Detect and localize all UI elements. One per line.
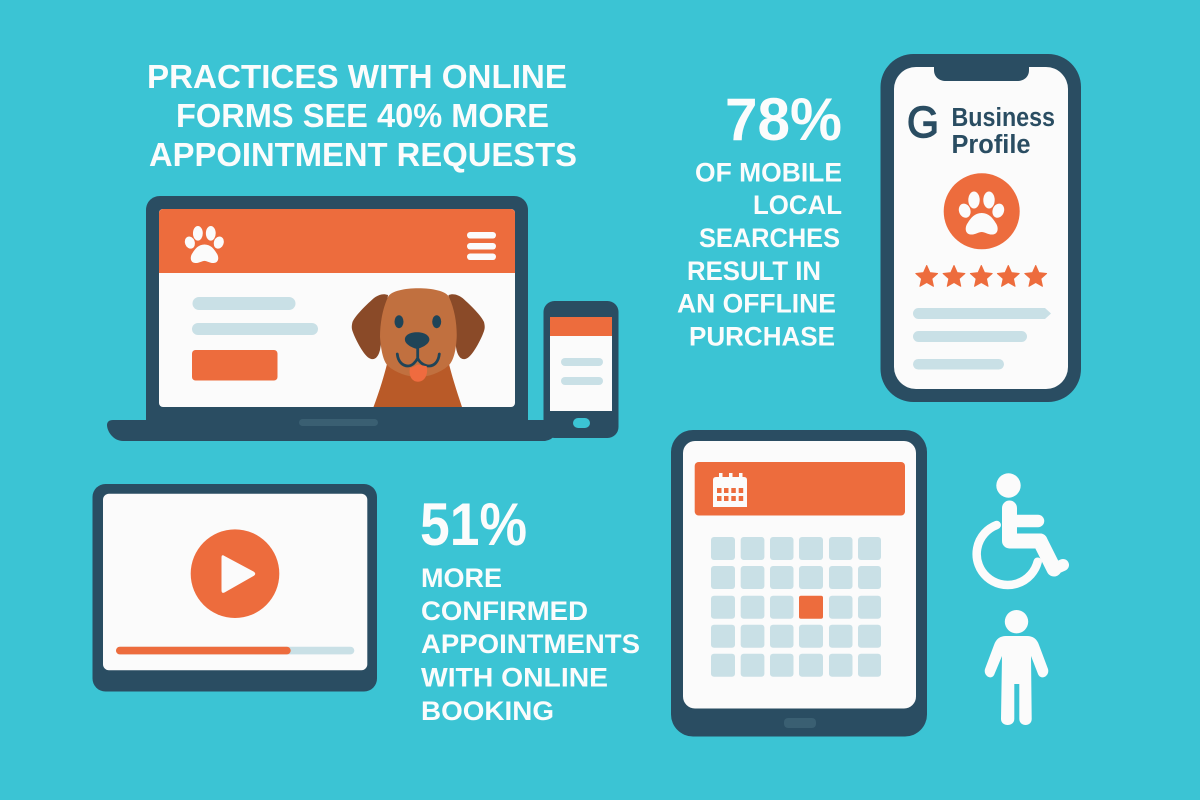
- tablet screen: [103, 494, 367, 670]
- five star rating: [916, 266, 1047, 286]
- selected date: [799, 596, 823, 619]
- phone content lines: [561, 358, 603, 385]
- laptop trackpad: [299, 419, 378, 426]
- stat description: WITH ONLINE: [421, 663, 608, 693]
- business profile label: [952, 104, 1055, 159]
- stat: 51 percent: [420, 491, 640, 726]
- title: [147, 58, 577, 173]
- stat description: LOCAL: [753, 190, 842, 220]
- icon: calendar: [713, 473, 747, 507]
- icon: paw logo: [183, 226, 226, 263]
- form lines: [192, 297, 318, 335]
- icon: menu: [467, 232, 496, 260]
- icon: play button: [191, 529, 279, 618]
- phone screen: [894, 67, 1068, 389]
- phone body: [544, 301, 618, 438]
- logo G: G: [907, 98, 939, 147]
- video tablet: [92, 484, 377, 692]
- phone frame: [880, 54, 1081, 402]
- business profile label: Profile: [952, 131, 1030, 159]
- stat description: MORE: [421, 563, 502, 593]
- stat description: [677, 158, 842, 352]
- icon: standing person: [985, 610, 1048, 725]
- illustration: dog: [352, 288, 485, 407]
- stat description: [421, 563, 640, 726]
- laptop body: [146, 196, 528, 424]
- laptop screen: [159, 209, 515, 407]
- progress bar: [116, 647, 354, 654]
- title: FORMS SEE 40% MORE: [176, 97, 549, 134]
- business profile label: Business: [952, 104, 1055, 132]
- stat: 78 percent: [677, 86, 842, 352]
- stat description: OF MOBILE: [695, 158, 842, 188]
- title: APPOINTMENT REQUESTS: [149, 136, 577, 173]
- phone screen: [550, 317, 612, 411]
- phone notch: [934, 67, 1029, 81]
- laptop with website: [107, 196, 556, 441]
- review lines: [913, 308, 1051, 370]
- stat description: RESULT IN: [687, 256, 821, 286]
- laptop base: [107, 420, 556, 441]
- tablet screen: [683, 441, 916, 708]
- tablet frame: [671, 430, 927, 736]
- stat number: 51%: [420, 491, 527, 558]
- calendar tablet: [671, 430, 927, 736]
- phone button: [573, 418, 590, 428]
- small phone: [544, 301, 618, 438]
- stat description: BOOKING: [421, 696, 554, 726]
- stat description: APPOINTMENTS: [421, 629, 640, 659]
- phone header: [550, 317, 612, 336]
- stat number: 78%: [725, 86, 842, 153]
- icon: wheelchair user: [977, 473, 1063, 585]
- calendar header: [695, 462, 905, 516]
- stat description: CONFIRMED: [421, 596, 588, 626]
- stat description: SEARCHES: [699, 223, 840, 253]
- website header: [159, 209, 515, 273]
- icon: paw badge: [944, 173, 1020, 249]
- tablet home button: [784, 718, 816, 728]
- phone: business profile: [880, 54, 1081, 402]
- title: PRACTICES WITH ONLINE: [147, 58, 567, 95]
- calendar grid: [711, 537, 881, 677]
- tablet frame: [92, 484, 377, 692]
- form button: [192, 350, 278, 380]
- stat description: AN OFFLINE: [677, 289, 836, 319]
- stat description: PURCHASE: [689, 322, 835, 352]
